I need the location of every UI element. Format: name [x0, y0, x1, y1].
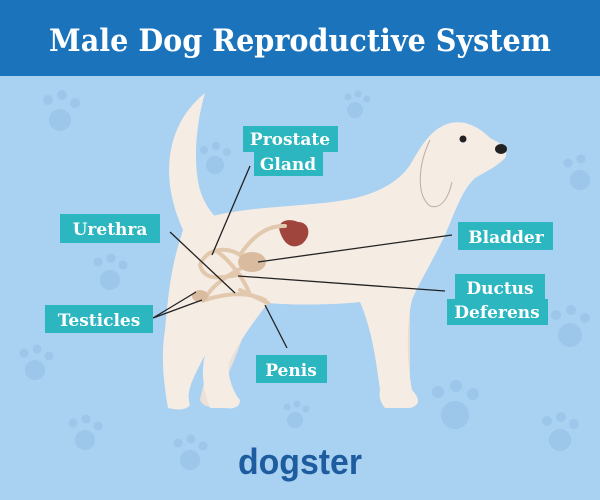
label: Bladder	[458, 222, 553, 250]
label: Prostate Gland: Prostate	[250, 130, 330, 150]
label: Urethra: Urethra	[73, 220, 147, 240]
label: Urethra	[60, 214, 160, 243]
label: Ductus Deferens: Deferens	[454, 303, 540, 323]
label: Testicles	[45, 305, 153, 333]
label: Testicles: Testicles	[58, 311, 140, 331]
label: Prostate Gland: Gland	[260, 155, 316, 175]
label: Penis: Penis	[265, 361, 317, 381]
tail	[169, 93, 222, 236]
label: Ductus Deferens: Ductus	[466, 279, 534, 299]
header bar	[0, 0, 600, 76]
title: Male Dog Reproductive System	[49, 23, 551, 59]
far legs	[392, 300, 410, 406]
body	[163, 122, 506, 409]
label: Bladder: Bladder	[468, 228, 545, 248]
logo: dogster: dogster	[238, 441, 362, 482]
bladder	[238, 252, 266, 272]
label: Penis	[256, 355, 327, 383]
label: Prostate Gland	[243, 126, 338, 176]
nose	[495, 144, 507, 154]
leader lines	[153, 166, 452, 348]
eye	[460, 136, 466, 142]
kidney	[279, 220, 308, 246]
ear	[420, 140, 452, 207]
label: Ductus Deferens	[447, 274, 548, 325]
tubes	[200, 226, 285, 303]
testicles	[192, 290, 208, 302]
dog illustration	[163, 93, 507, 409]
